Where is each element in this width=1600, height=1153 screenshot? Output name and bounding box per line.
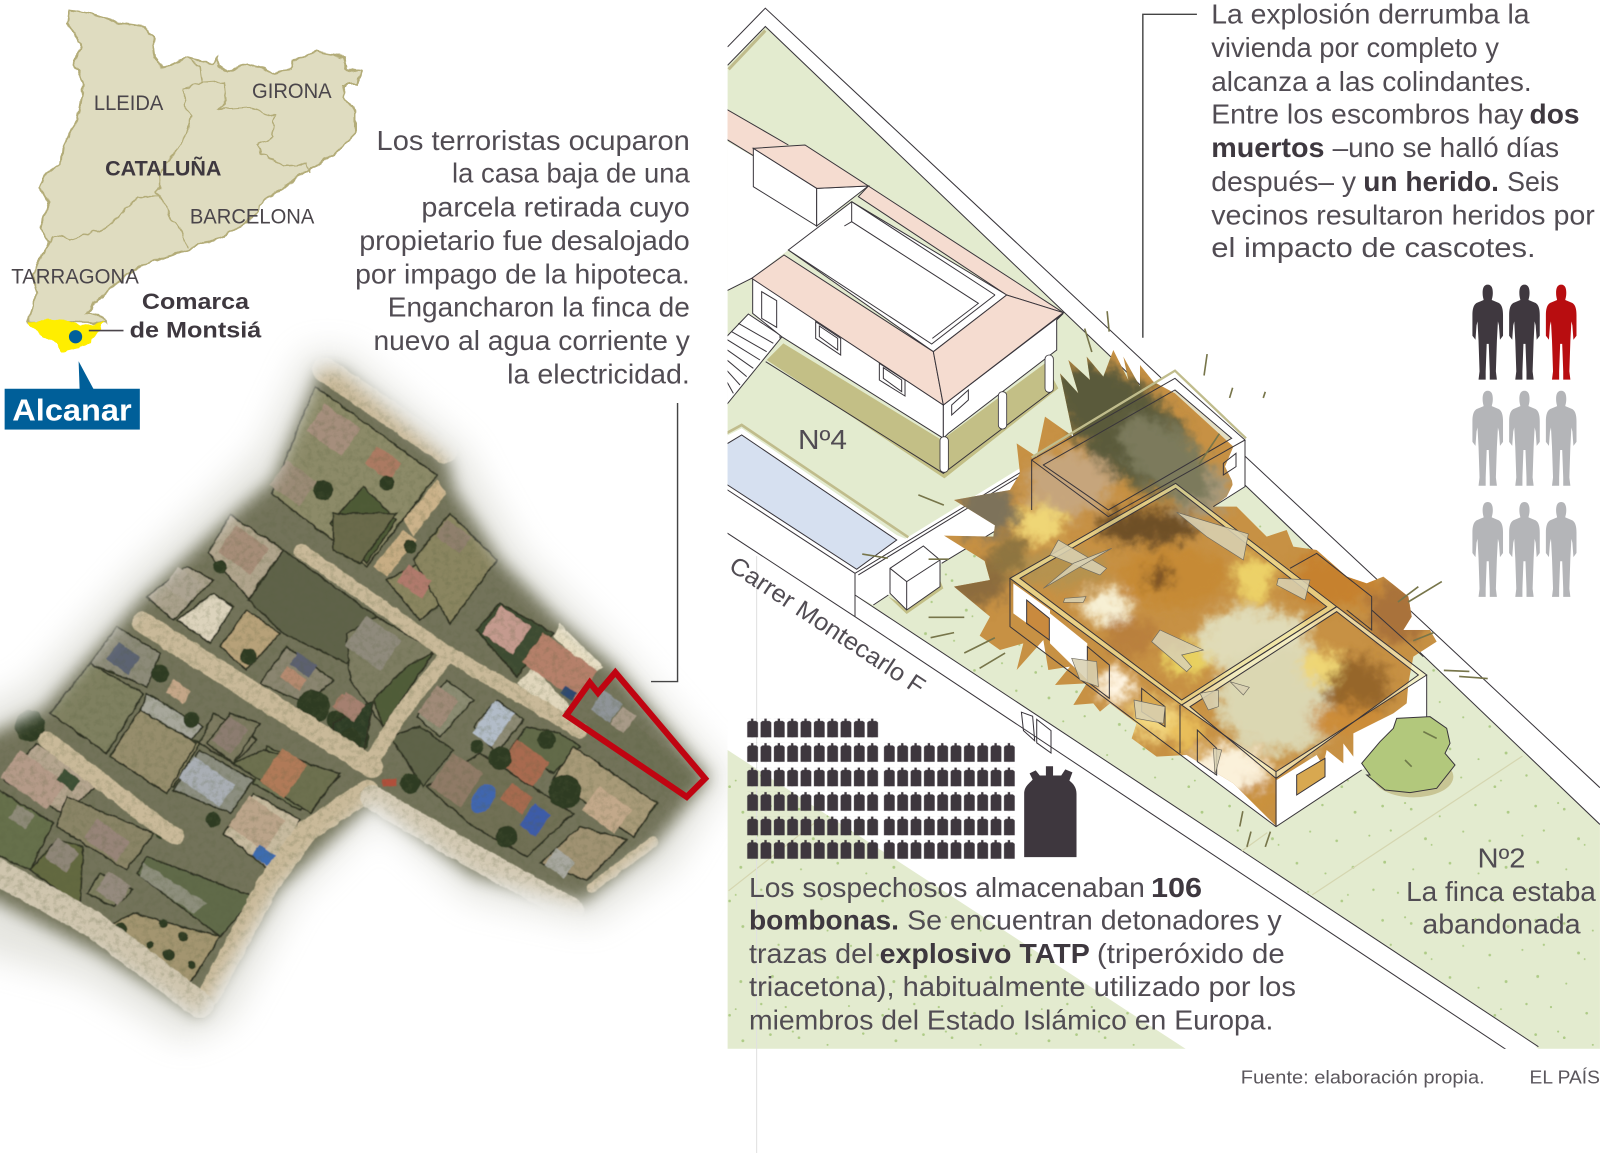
text: la explosión: vivienda por completo y	[1211, 32, 1499, 63]
ground: parcel nº2	[855, 480, 1600, 1049]
neighbours injured	[1472, 391, 1576, 597]
stairs	[725, 313, 783, 407]
text: bombonas	[749, 872, 1296, 1036]
south-west blocks	[0, 710, 368, 983]
pictogram: gas cylinders	[746, 718, 1016, 859]
north-west blocks	[15, 387, 458, 810]
illustration	[725, 8, 1600, 1051]
text: los terroristas: Los terroristas ocuparon	[377, 125, 690, 156]
comarca label: de Montsiá	[130, 318, 262, 343]
photo body	[0, 357, 718, 1024]
text: bombonas: triacetona), habitualmente utilizado por los	[749, 971, 1296, 1002]
text: los terroristas: por impago de la hipoteca.	[355, 259, 690, 290]
source credit: Fuente: elaboración propia.	[1241, 1067, 1485, 1088]
dead	[1472, 285, 1540, 380]
white wall remains	[1013, 480, 1407, 826]
small utility box	[888, 546, 943, 614]
text: la explosión: dos	[1530, 98, 1580, 129]
text: la explosión	[1211, 0, 1595, 263]
text: la explosión: después– y	[1211, 166, 1356, 197]
text: los terroristas: la casa baja de una	[452, 158, 690, 189]
callout: Alcanar	[5, 361, 140, 430]
callout: Alcanar: Alcanar	[12, 393, 132, 427]
text: la explosión: Seis	[1507, 166, 1559, 197]
photo fringe	[0, 352, 730, 1041]
text: los terroristas: la electricidad.	[507, 359, 690, 390]
text: los terroristas	[355, 125, 690, 390]
text: la explosión: muertos	[1211, 132, 1324, 163]
province labels: LLEIDA	[94, 91, 164, 115]
text: bombonas: (triperóxido de	[1097, 938, 1285, 969]
text: bombonas: miembros del Estado Islámico en Europa.	[749, 1005, 1273, 1036]
fireball and smoke	[944, 350, 1436, 826]
wall bands	[1010, 483, 1427, 778]
parcel division lines	[729, 756, 1522, 895]
house nº4	[725, 202, 1063, 478]
Alcanar location dot	[69, 330, 82, 343]
faint crop line	[756, 556, 758, 1153]
comarca label: Comarca	[142, 289, 250, 314]
text: bombonas: Se encuentran detonadores y	[907, 905, 1282, 936]
debris	[1043, 512, 1310, 775]
text: los terroristas: parcela retirada cuyo	[421, 191, 690, 222]
province labels: TARRAGONA	[11, 265, 139, 289]
wall windows	[1027, 453, 1325, 795]
text: bombonas: bombonas.	[749, 905, 899, 936]
explosion rays	[862, 311, 1488, 847]
roof	[788, 202, 1007, 352]
map: Cataluña	[11, 10, 361, 352]
text: los terroristas: propietario fue desalojado	[359, 225, 690, 256]
text: la explosión: alcanza a las colindantes.	[1211, 66, 1532, 97]
aerial photo	[0, 327, 755, 1061]
source credit	[1241, 1067, 1600, 1088]
source credit: EL PAÍS	[1530, 1067, 1600, 1088]
pillars	[940, 355, 1053, 472]
text: la explosión: el impacto de cascotes.	[1211, 232, 1536, 263]
street strip and wall	[725, 467, 1538, 1051]
pool	[725, 425, 908, 572]
windows	[762, 292, 968, 415]
label: street name: Carrer Montecarlo F	[724, 552, 930, 701]
ground: parcel nº4	[728, 27, 1140, 539]
label: Nº2: La finca estaba	[1406, 876, 1597, 907]
leader: right text	[1143, 14, 1197, 338]
gate	[1021, 712, 1051, 753]
unpaved roads	[0, 369, 653, 1005]
text: bombonas: trazas del	[749, 938, 873, 969]
icon: big cylinder	[1024, 766, 1077, 857]
label: Nº2	[1406, 842, 1597, 940]
pictogram: victims	[1472, 285, 1576, 597]
text: bombonas: Los sospechosos almacenaban	[749, 872, 1145, 903]
green triangle under bottles	[728, 750, 1186, 1049]
text: la explosión: Entre los escombros hay	[1211, 98, 1524, 129]
comarca label	[130, 289, 262, 343]
red outline: plot	[566, 672, 705, 797]
label: Nº4: Nº4	[798, 424, 847, 455]
south-east blocks	[333, 513, 700, 880]
province labels: BARCELONA	[190, 204, 315, 228]
text: la explosión: vecinos resultaron heridos por	[1211, 199, 1595, 230]
text: la explosión: –uno se halló días	[1333, 132, 1559, 163]
text: los terroristas: Engancharon la finca de	[388, 291, 690, 322]
Comarca de Montsiá highlight	[28, 320, 105, 352]
photo grain	[0, 372, 658, 1012]
text: la explosión: un herido.	[1363, 166, 1499, 197]
province labels	[11, 79, 332, 289]
text: bombonas: explosivo TATP	[880, 938, 1090, 969]
province labels: CATALUÑA	[105, 156, 221, 181]
label: Nº2: abandonada	[1422, 909, 1581, 940]
house base: white walls	[1038, 640, 1276, 826]
floor shadow	[767, 343, 1058, 478]
parcel outer wall	[728, 8, 1600, 824]
injured	[1546, 285, 1576, 380]
leader: left text	[651, 403, 678, 682]
label: Nº2: Nº2	[1478, 842, 1525, 873]
exploded house	[944, 350, 1436, 828]
upper neighbour house: court, pink band and annex	[728, 109, 1064, 312]
tree	[1362, 717, 1455, 797]
walls	[753, 278, 943, 438]
text: bombonas: 106	[1151, 872, 1202, 903]
text: los terroristas: nuevo al agua corriente y	[373, 325, 690, 356]
map leader line	[89, 330, 124, 332]
province labels: GIRONA	[252, 79, 332, 103]
